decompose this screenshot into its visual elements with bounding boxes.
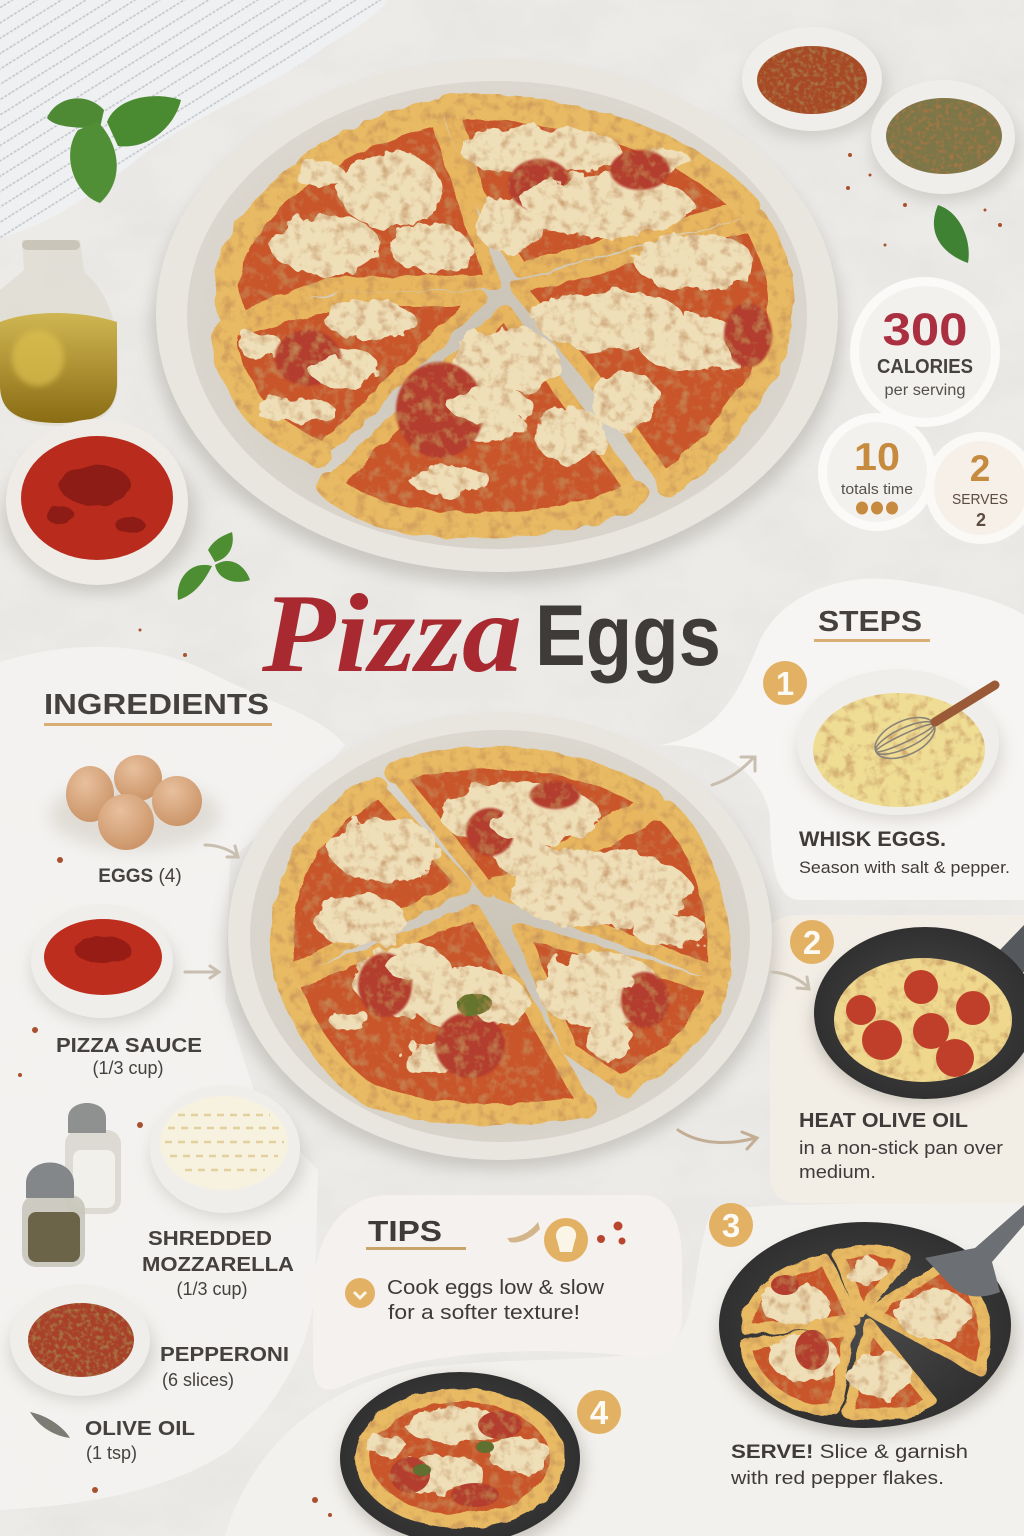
tips text: for a softer texture! — [388, 1302, 580, 1324]
icon: tips check — [345, 1278, 375, 1308]
panel: tips background — [313, 1195, 682, 1390]
title: Eggs — [535, 588, 721, 684]
bowl: red pepper flakes — [742, 27, 887, 138]
step 2 text — [799, 1109, 1003, 1182]
step 3 text — [730, 1442, 968, 1488]
slice: bottom — [288, 912, 586, 1115]
ingredient: mozzarella bowl — [150, 1085, 304, 1216]
plate: top — [152, 58, 842, 584]
step 2 badge: 2 — [803, 924, 821, 961]
step 1 badge — [763, 661, 807, 705]
slice: right — [500, 810, 720, 975]
icon: basil leaf right — [934, 205, 969, 263]
step 1 text: Season with salt & pepper. — [799, 858, 1010, 877]
panel: ingredients background — [0, 647, 345, 1510]
stat: serves: 2 — [970, 448, 990, 489]
step 2 text: in a non-stick pan over — [799, 1138, 1003, 1158]
icon: drops — [856, 502, 898, 514]
label: olive oil — [85, 1418, 195, 1463]
plate: centre — [224, 712, 776, 1170]
crust: outer rim — [224, 106, 781, 525]
label: pepperoni: PEPPERONI — [160, 1344, 289, 1366]
label: pepperoni — [160, 1344, 289, 1390]
stat: total time — [818, 413, 936, 531]
label: pizza sauce — [56, 1034, 202, 1078]
label: shredded mozzarella: SHREDDED — [148, 1228, 272, 1250]
tips heading — [366, 1216, 466, 1250]
slice: lower left — [224, 298, 480, 455]
pepperoni slices — [275, 150, 772, 458]
step 2 text: HEAT OLIVE OIL — [799, 1109, 968, 1132]
crust: outer rim — [282, 757, 720, 1115]
panel: bottom step background — [225, 1203, 1024, 1536]
top pizza — [224, 106, 781, 525]
heading: steps: STEPS — [818, 606, 922, 638]
ingredient: salt shaker — [65, 1103, 121, 1214]
step 3 badge: 3 — [722, 1207, 740, 1244]
icon: tips bulb — [507, 1218, 626, 1262]
pepperoni slices — [358, 781, 669, 1078]
step 2 text: medium. — [799, 1162, 876, 1182]
step 1 text: WHISK EGGS. — [799, 828, 946, 851]
stat: serves: 2 — [976, 510, 986, 530]
label: pizza sauce: PIZZA SAUCE — [56, 1034, 202, 1057]
icon: olive oil jar — [0, 240, 118, 426]
title — [261, 572, 721, 696]
tips heading: TIPS — [368, 1216, 442, 1248]
label: pizza sauce: (1/3 cup) — [92, 1058, 164, 1078]
slice: bottom — [330, 312, 636, 525]
stat: serves — [925, 432, 1024, 544]
slice: top — [450, 106, 748, 270]
stat: calories — [850, 277, 1000, 427]
step 4 pan — [340, 1372, 584, 1536]
slice: right — [518, 222, 781, 484]
ingredient: pepperoni flakes bowl — [10, 1284, 154, 1400]
step 3 badge — [709, 1203, 753, 1247]
label: shredded mozzarella — [142, 1228, 294, 1299]
step 4 badge — [577, 1390, 621, 1434]
label: olive oil: OLIVE OIL — [85, 1418, 195, 1440]
stat: total time: totals time — [841, 482, 913, 498]
slice: upper left — [282, 788, 465, 975]
step 3 text: SERVE! Slice & garnish — [731, 1442, 968, 1463]
slice: lower right — [520, 930, 718, 1086]
step 3 text: with red pepper flakes. — [730, 1468, 944, 1488]
stat: calories: 300 — [882, 304, 968, 355]
ingredient: pepper shaker — [22, 1162, 85, 1267]
icon: tomato sauce bowl — [4, 419, 196, 593]
step 4 badge: 4 — [590, 1394, 609, 1431]
ingredient: eggs — [50, 755, 220, 850]
icon: basil top left — [47, 96, 181, 203]
panel: step 2 background — [770, 915, 1024, 1203]
label: olive oil: (1 tsp) — [86, 1443, 137, 1463]
slice: top — [395, 757, 652, 890]
tips text — [387, 1277, 605, 1324]
step 3 pan — [719, 1205, 1024, 1435]
icon: olive oil drop — [30, 1412, 70, 1438]
step 1 text — [799, 828, 1010, 877]
label: shredded mozzarella: (1/3 cup) — [176, 1279, 248, 1299]
stat: total time: 10 — [854, 436, 900, 479]
arrows — [185, 757, 809, 1149]
step 2 pan — [813, 925, 1024, 1102]
label: eggs: EGGS (4) — [98, 866, 182, 887]
icon: basil beside bowl — [178, 532, 250, 600]
centre pizza — [282, 757, 720, 1115]
towel — [0, 0, 388, 238]
garnish — [457, 993, 493, 1017]
heading: ingredients: INGREDIENTS — [44, 689, 269, 721]
label: shredded mozzarella: MOZZARELLA — [142, 1254, 294, 1276]
slice: upper left — [227, 112, 493, 320]
step 2 badge — [790, 920, 834, 964]
ingredient: pizza sauce bowl — [31, 904, 176, 1022]
stat: serves: SERVES — [952, 491, 1008, 508]
step 1 badge: 1 — [776, 665, 794, 702]
bowl: dried oregano — [871, 80, 1019, 201]
tips text: Cook eggs low & slow — [387, 1277, 605, 1299]
panel: steps background — [660, 579, 1024, 900]
stat: calories: CALORIES — [877, 356, 973, 378]
stat: calories: per serving — [884, 382, 966, 399]
title: Pizza — [261, 572, 522, 696]
step 1 bowl with whisk — [797, 669, 1002, 820]
label: pepperoni: (6 slices) — [162, 1370, 234, 1390]
